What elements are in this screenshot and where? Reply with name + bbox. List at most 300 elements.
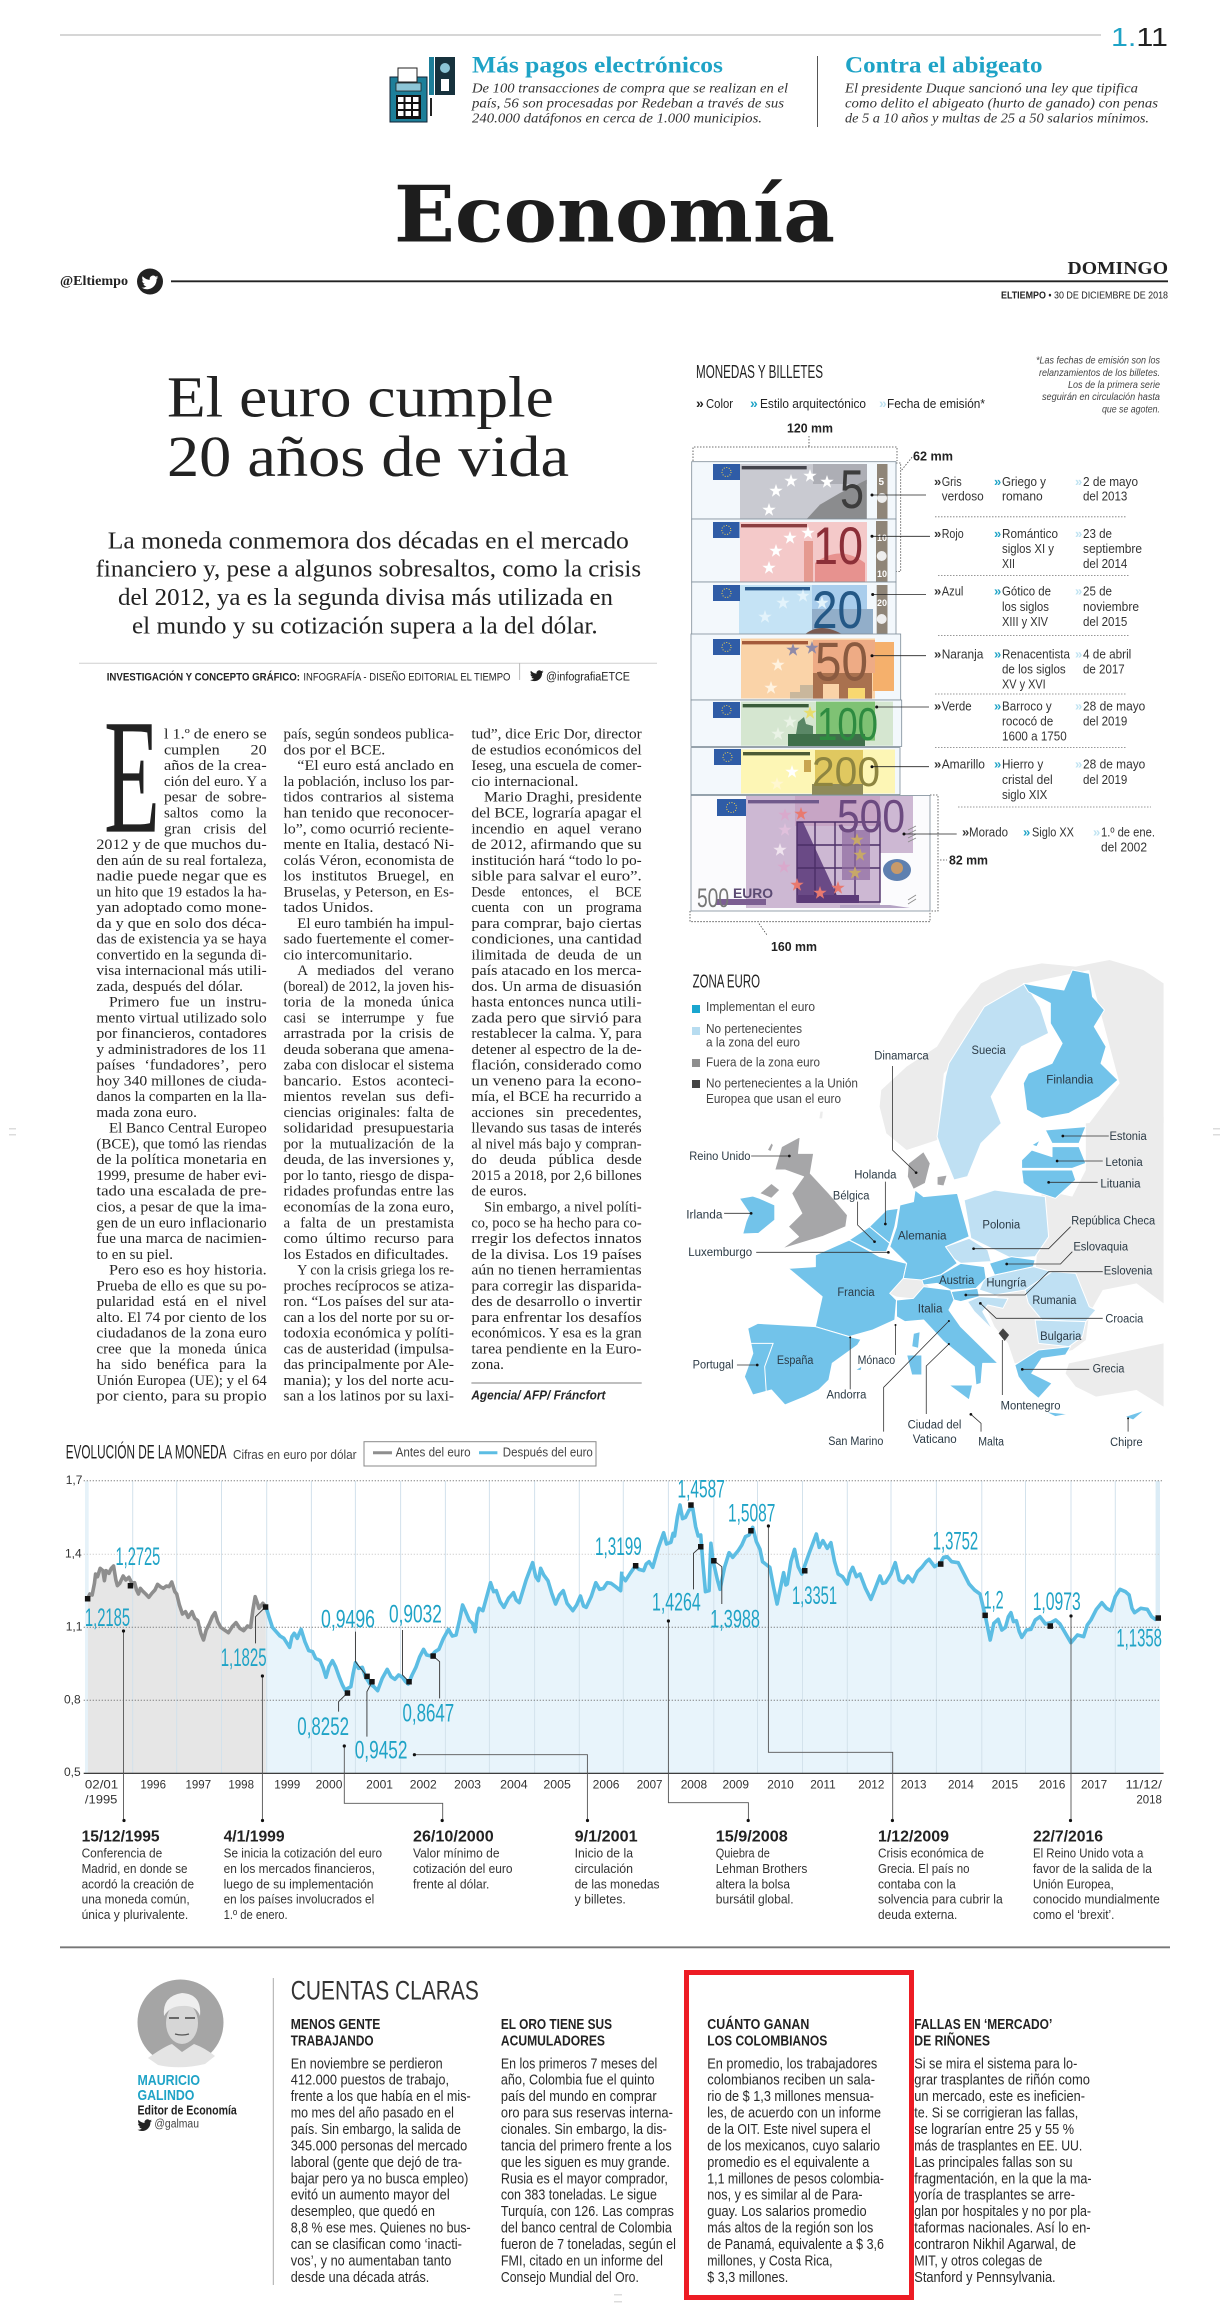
banknote: 200 euro: [691, 748, 900, 795]
map country labels: Alemania: [898, 1228, 947, 1242]
data value labels: 1,1825: [221, 1644, 267, 1672]
article body column 1: de la política monetaria en: [96, 1152, 268, 1168]
brief: fallas en mercado de riñones: se lograrían entre 25 y 55 %: [914, 2121, 1074, 2138]
article body column 1: 1999, presume de haber evi-: [96, 1168, 267, 1184]
banknote attribute table: Romántico: [1002, 526, 1058, 541]
brief: menos gente trabajando: En noviembre se perdieron: [291, 2055, 443, 2072]
brief: menos gente trabajando: bajar pero ya no busca empleo): [291, 2170, 468, 2187]
timeline note: 15/9/2008: Lehman Brothers: [716, 1862, 807, 1876]
article body column 1: [96, 687, 268, 1405]
banknote: 100 euro: [691, 698, 902, 750]
map legend: Europea que usan el euro: [706, 1091, 841, 1106]
map legend: Implementan el euro: [706, 999, 815, 1014]
credit line: INFOGRAFÍA - DISEÑO EDITORIAL EL TIEMPO: [303, 671, 511, 684]
dimension labels: [771, 422, 988, 954]
timeline note: 26/10/2000: Valor mínimo de: [413, 1847, 500, 1861]
banknote attribute table: Azul: [942, 584, 963, 599]
timeline note: 15/12/1995: Conferencia de: [82, 1847, 162, 1861]
brief: fallas en mercado de riñones: te. Si se corrigieran las fallas,: [914, 2105, 1078, 2122]
x axis labels: 2012: [858, 1777, 885, 1791]
article body column 3: tud”, dice Eric Dor, director: [471, 727, 642, 743]
article body column 2: por lo tanto, riesgo de dispa-: [284, 1168, 454, 1184]
banknote attribute table: Siglo XX: [1032, 825, 1074, 840]
article body column 1: danos la comparten en la lla-: [96, 1089, 267, 1105]
timeline note: 1/12/2009: contaba con la: [878, 1877, 956, 1891]
brief highlighted in red: cuánto ganan los colombianos: 1,1 millones de pesos colombia-: [707, 2170, 884, 2187]
brief: el oro tiene sus acumuladores: cionales. Sin embargo, la dis-: [501, 2121, 667, 2138]
y axis labels: 0,8: [64, 1692, 81, 1706]
news brief: Contra el abigeato: Contra el abigeato: [845, 53, 1042, 78]
credit line: @infografiaETCE: [546, 672, 630, 684]
headline: [167, 365, 569, 489]
banknote attribute table: 4 de abril: [1083, 646, 1131, 661]
banknote attribute table: Gris: [942, 474, 962, 489]
key of banknote table columns: Color: [706, 396, 734, 411]
brief: el oro tiene sus acumuladores: [501, 2017, 676, 2286]
data value labels: 1,2185: [85, 1604, 130, 1632]
timeline note: 15/9/2008: bursátil global.: [716, 1893, 794, 1907]
article body column 3: mía, el BCE ha recurrido a: [471, 1089, 642, 1105]
brief highlighted in red: cuánto ganan los colombianos: de la OIT. Este nivel supera el: [707, 2121, 871, 2138]
brief: menos gente trabajando: 8,8 % ese mes. Quienes no bus-: [291, 2220, 471, 2237]
article body column 3: flación, considerado como: [471, 1058, 642, 1074]
banknote attribute table: Naranja: [942, 646, 984, 661]
columnist byline: [138, 2072, 237, 2131]
data value labels: 1,5087: [728, 1500, 775, 1528]
timeline note: 22/7/2016: [1033, 1829, 1160, 1922]
x axis labels: 1999: [274, 1777, 301, 1791]
key of banknote table columns: [696, 395, 985, 411]
data value labels: 0,9496: [321, 1605, 375, 1633]
timeline note: 4/1/1999: Se inicia la cotización del euro: [224, 1847, 382, 1861]
map country labels: Mónaco: [858, 1353, 895, 1367]
brief: el oro tiene sus acumuladores: ACUMULADORES: [501, 2034, 605, 2050]
article body column 1: saltos como la: [164, 806, 267, 822]
article body column 2: como último recurso para: [284, 1231, 455, 1247]
banknote: 10 euro: [692, 517, 896, 582]
x axis labels: 2017: [1081, 1777, 1108, 1791]
article body column 2: A mediados del verano: [297, 963, 454, 979]
brief: menos gente trabajando: 345.000 personas del mercado: [291, 2138, 467, 2154]
banknote: 20 euro: 20: [812, 581, 863, 640]
map country labels: Suecia: [972, 1043, 1006, 1057]
banknote: 10 euro: 10: [877, 569, 887, 579]
x axis labels: 1998: [228, 1777, 254, 1791]
article body column 1: ciudadanos de la zona euro: [96, 1326, 267, 1342]
article body column 2: [284, 727, 455, 1405]
brief: menos gente trabajando: vos’, y no aumentaban tanto: [291, 2252, 451, 2270]
article body column 1: Pero eso es hoy historia.: [109, 1262, 267, 1278]
headline: 20 años de vida: [167, 424, 569, 489]
data line after the euro, 1999-2007: [266, 1563, 622, 1691]
x axis labels: 11/12/: [1126, 1777, 1163, 1791]
heading: monedas y billetes: MONEDAS Y BILLETES: [696, 361, 823, 382]
article body column 2: das principalmente por Ale-: [284, 1357, 454, 1373]
map country labels: Eslovenia: [1104, 1263, 1153, 1277]
article body column 3: tarea pendiente en la Euro-: [471, 1341, 642, 1357]
article body column 1: años de la crea-: [164, 758, 267, 774]
map legend: No pertenecientes: [706, 1021, 802, 1036]
x axis labels: 2008: [681, 1777, 708, 1791]
banknote attribute table: »: [934, 698, 941, 714]
x axis labels: 02/01: [85, 1777, 119, 1791]
article body column 1: y administradores de los 11: [96, 1042, 267, 1058]
timeline note: 26/10/2000: [413, 1829, 513, 1891]
banknote attribute table: »: [1075, 584, 1082, 599]
data value labels: 1,3752: [933, 1527, 978, 1555]
brief: fallas en mercado de riñones: glan por hospitales y no por pla-: [914, 2203, 1091, 2220]
article body column 1: yan adoptado como mone-: [96, 900, 267, 916]
brief highlighted in red: cuánto ganan los colombianos: colombianos reciben un sala-: [707, 2072, 875, 2089]
banknote attribute table: »: [1075, 526, 1082, 541]
brief: menos gente trabajando: [291, 2017, 471, 2286]
banknote: 50 euro: [691, 631, 901, 700]
article body column 3: do deuda pública desde: [471, 1152, 642, 1168]
x axis labels: 2018: [1136, 1792, 1162, 1806]
timeline note: 4/1/1999: luego de su implementación: [224, 1877, 374, 1891]
article body column 1: gen de un euro inflacionario: [96, 1215, 267, 1231]
article body column 1: nadie puede negar que es: [96, 868, 267, 884]
x axis labels: 2016: [1039, 1777, 1066, 1791]
brief: el oro tiene sus acumuladores: con 383 toneladas. Le sigue: [501, 2187, 657, 2204]
map country labels: [686, 1043, 1155, 1449]
article body column 2: bancario. Estos aconteci-: [284, 1073, 454, 1089]
banknote attribute table: 28 de mayo: [1083, 698, 1145, 714]
news brief: Más pagos electrónicos: Más pagos electrónicos: [472, 53, 723, 78]
dimension labels: 62 mm: [913, 450, 953, 464]
twitter handle and masthead rule: [60, 268, 1168, 294]
x axis labels: 2014: [948, 1777, 974, 1791]
map legend: Fuera de la zona euro: [706, 1055, 820, 1070]
brief highlighted in red: cuánto ganan los colombianos: En promedio, los trabajadores: [707, 2055, 877, 2072]
x axis labels: 1996: [140, 1777, 166, 1791]
brief: el oro tiene sus acumuladores: tancia del primero frente a los: [501, 2138, 672, 2154]
map country labels: Andorra: [827, 1388, 867, 1402]
map legend: No pertenecientes a la Unión: [706, 1076, 858, 1091]
article body column 2: can a los del norte por su or-: [284, 1310, 454, 1326]
banknote attribute table: del 2019: [1083, 713, 1127, 728]
timeline note: 9/1/2001: [575, 1829, 660, 1907]
banknote attribute table: del 2015: [1083, 614, 1127, 629]
article body column 2: dos por el BCE.: [284, 742, 385, 758]
timeline note: 4/1/1999: en los países involucrados el: [224, 1893, 374, 1907]
banknote attribute table: siglo XIX: [1002, 787, 1048, 802]
headline: El euro cumple: [167, 365, 554, 430]
year gridlines: [133, 1481, 1115, 1773]
article body column 2: proches recíprocos se atiza-: [284, 1278, 454, 1294]
timeline note: 1/12/2009: Grecia. El país no: [878, 1862, 970, 1876]
map country labels: Rumania: [1032, 1293, 1076, 1307]
banknote attribute table: cristal del: [1002, 772, 1053, 787]
timeline note: 26/10/2000: cotización del euro: [413, 1862, 513, 1876]
footnote on issue dates: *Las fechas de emisión son los: [1036, 355, 1161, 367]
map country labels: Italia: [918, 1302, 943, 1316]
timeline note: 26/10/2000: 26/10/2000: [413, 1829, 494, 1846]
banknote attribute table: 28 de mayo: [1083, 757, 1145, 772]
banknote: 500 euro: [691, 790, 930, 913]
timeline note: 15/12/1995: única y plurivalente.: [82, 1908, 188, 1922]
chart legend: [364, 1442, 596, 1466]
map country labels: Austria: [939, 1273, 974, 1287]
article body column 3: Desde entonces, el BCE: [471, 884, 642, 900]
map country labels: Lituania: [1100, 1176, 1141, 1190]
map country labels: Hungría: [986, 1276, 1026, 1290]
x axis labels: 2006: [593, 1777, 620, 1791]
article body column 2: casi se interrumpe y fue: [284, 1010, 454, 1026]
news brief: Contra el abigeato: de 5 a 10 años y multas de 25 a 50 salarios mínimos.: [845, 111, 1149, 126]
article body column 2: país, según sondeos publica-: [284, 727, 454, 743]
article body column 2: por la mutualización de la: [284, 1136, 455, 1152]
article body column 1: hoy 340 millones de ciuda-: [96, 1073, 267, 1089]
article body column 2: zaba con dislocar el sistema: [284, 1058, 455, 1074]
columnist byline: GALINDO: [138, 2087, 195, 2104]
map country labels: Portugal: [693, 1358, 734, 1372]
article body column 3: Sin embargo, a nivel políti-: [484, 1200, 642, 1216]
data point markers: [85, 1502, 1161, 1696]
brief: fallas en mercado de riñones: Si se mira el sistema para lo-: [914, 2055, 1077, 2072]
article body column 3: zada pero que sirvió para: [471, 1010, 642, 1026]
brief: el oro tiene sus acumuladores: Rusia es el mayor comprador,: [501, 2170, 668, 2187]
brief highlighted in red: cuánto ganan los colombianos: [686, 1972, 912, 2298]
article body column 3: dos. Un arma de disuasión: [471, 979, 643, 995]
banknote: 20 euro: 20: [877, 598, 887, 608]
brief: el oro tiene sus acumuladores: fueron de 7 toneladas, según el: [501, 2236, 676, 2253]
article body column 2: arrastrada por la crisis de: [284, 1026, 454, 1042]
brief: fallas en mercado de riñones: DE RIÑONES: [914, 2032, 990, 2050]
article body column 1: países ‘fundadores’, pero: [96, 1058, 267, 1074]
article body column 2: Y con la crisis griega los re-: [297, 1262, 454, 1278]
columnist portrait: [138, 1980, 224, 2067]
x axis labels: 2002: [410, 1777, 437, 1791]
timeline note: 22/7/2016: conocido mundialmente: [1033, 1893, 1160, 1907]
timeline note: 9/1/2001: y billetes.: [575, 1893, 626, 1907]
news brief: Más pagos electrónicos: De 100 transacciones de compra que se realizan en el: [471, 81, 788, 96]
key of banknote table columns: »: [879, 395, 887, 411]
banknote: 50 euro: 50: [815, 631, 868, 693]
brief: menos gente trabajando: frente a los que había en el mis-: [291, 2088, 471, 2105]
map country labels: Chipre: [1110, 1435, 1143, 1449]
banknote attribute table: los siglos: [1002, 599, 1049, 614]
key of banknote table columns: »: [696, 395, 704, 411]
y axis labels: 0,5: [64, 1765, 81, 1779]
article body column 2: san a los latinos por su laxi-: [284, 1389, 454, 1405]
x axis labels: 2003: [454, 1777, 481, 1791]
brief highlighted in red: cuánto ganan los colombianos: promedio es el equivalente a: [707, 2154, 870, 2171]
timeline note: 1/12/2009: deuda externa.: [878, 1908, 957, 1922]
section title: Economía: Economía: [394, 170, 835, 261]
article body column 1: por ciento, para su propio: [96, 1389, 267, 1405]
data line after the euro, 2007-2018: [622, 1505, 1156, 1643]
dimension marks for banknotes: [690, 436, 947, 935]
article body column 1: mada zona euro.: [96, 1105, 197, 1121]
data value labels: 0,8647: [402, 1700, 454, 1728]
banknote attribute table: noviembre: [1083, 599, 1139, 614]
banknote attribute table: Renacentista: [1002, 646, 1071, 661]
brief: menos gente trabajando: país. Sin embargo, la salida de: [291, 2121, 461, 2138]
brief: fallas en mercado de riñones: un mercado, este es ineficien-: [914, 2088, 1085, 2105]
article body column 2: (boreal) de 2012, la joven his-: [284, 979, 454, 995]
banknote: 500 euro: 500: [697, 883, 729, 913]
banknote: 10 euro: 10: [877, 533, 887, 543]
value label leader lines: [256, 1608, 440, 1737]
banknote: 5 euro: [692, 458, 896, 520]
article body column 3: rregir los defectos innatos: [471, 1231, 642, 1247]
article body column 3: económicos. Y esa es la gran: [471, 1326, 642, 1342]
map country labels: Ciudad del: [908, 1417, 961, 1431]
x axis labels: 2004: [500, 1777, 528, 1791]
article body column 1: da y que en solo dos déca-: [96, 916, 267, 932]
timeline note: 15/9/2008: altera la bolsa: [716, 1877, 790, 1891]
chart title and unit: EVOLUCIÓN DE LA MONEDA: [66, 1440, 226, 1463]
article body column 1: cree que la moneda única: [96, 1341, 267, 1357]
timeline note: 1/12/2009: solvencia para cubrir la: [878, 1893, 1003, 1907]
deck paragraph: La moneda conmemora dos décadas en el mercado: [108, 528, 629, 554]
footnote on issue dates: [1036, 355, 1161, 415]
x axis labels: 1997: [186, 1777, 211, 1791]
article body column 2: han tenido que reconocer-: [284, 806, 454, 822]
banknote attribute table: [870, 474, 1155, 855]
map country labels: República Checa: [1071, 1213, 1155, 1227]
banknote attribute table: »: [1075, 698, 1082, 714]
columnist byline: MAURICIO: [138, 2072, 200, 2089]
key of banknote table columns: Estilo arquitectónico: [760, 396, 866, 411]
brief: fallas en mercado de riñones: FALLAS EN ‘MERCADO’: [914, 2017, 1052, 2033]
banknote attribute table: »: [994, 646, 1001, 661]
article body column 3: del BCE, lograría apagar el: [471, 806, 642, 822]
brief: el oro tiene sus acumuladores: Turquía, con 126. Las compras: [501, 2203, 674, 2220]
article body column 1: (BCE), que tomó las riendas: [96, 1136, 267, 1152]
x axis labels: 2015: [992, 1777, 1018, 1791]
dimension labels: 82 mm: [949, 853, 988, 867]
brief: el oro tiene sus acumuladores: oro para sus reservas interna-: [501, 2105, 673, 2122]
banknote attribute table: Griego y: [1002, 474, 1046, 489]
data value labels: [85, 1475, 1162, 1764]
dimension labels: 160 mm: [771, 940, 817, 954]
article body column 2: tados Unidos.: [284, 900, 374, 916]
article body column 3: para enfrentar los desafíos: [471, 1310, 642, 1326]
banknote attribute table: »: [994, 757, 1001, 772]
article body column 1: visa internacional más utili-: [96, 963, 267, 979]
columnist byline: Editor de Economía: [138, 2102, 237, 2117]
article body column 2: toria de la moneda única: [284, 995, 455, 1011]
banknote attribute table: »: [1093, 825, 1100, 840]
dimension labels: 120 mm: [787, 422, 833, 436]
map country labels: Eslovaquia: [1073, 1240, 1128, 1254]
article body column 1: un hito que 19 estados la ha-: [96, 884, 267, 900]
banknote attribute table: 2 de mayo: [1083, 474, 1138, 489]
deck paragraph: financiero y, pese a algunos sobresaltos, como la crisis: [96, 557, 641, 583]
article body column 1: por financieros, contadores: [96, 1026, 267, 1042]
banknote: 5 euro: 5: [878, 477, 884, 488]
banknote attribute table: Rojo: [942, 526, 964, 541]
brief highlighted in red: cuánto ganan los colombianos: LOS COLOMBIANOS: [707, 2034, 828, 2050]
timeline note: 26/10/2000: frente al dólar.: [413, 1877, 489, 1891]
brief: el oro tiene sus acumuladores: FMI, citado en un informe del: [501, 2252, 663, 2270]
banknote attribute table: »: [934, 584, 941, 599]
map country labels: San Marino: [828, 1434, 883, 1448]
article body column 2: ron. “Los países del sur ata-: [284, 1294, 454, 1310]
brief: el oro tiene sus acumuladores: país del mundo en comprar: [501, 2088, 657, 2105]
brief highlighted in red: cuánto ganan los colombianos: de los mexicanos, cuyo salario: [707, 2138, 880, 2154]
banknote attribute table: 23 de: [1083, 526, 1112, 541]
article body column 3: detener al espectro de la de-: [471, 1042, 642, 1058]
map leader lines: [724, 1066, 1128, 1432]
heading: zona euro: ZONA EURO: [693, 970, 760, 991]
article body column 2: a falta de un prestamista: [284, 1215, 455, 1231]
footnote on issue dates: seguirán en circulación hasta: [1042, 391, 1160, 403]
timeline note: 4/1/1999: [224, 1829, 382, 1922]
article body column 1: tado una escalada de pre-: [96, 1184, 267, 1200]
brief: fallas en mercado de riñones: [914, 2017, 1092, 2286]
map country labels: Bélgica: [833, 1188, 870, 1202]
timeline note: 9/1/2001: Inicio de la: [575, 1847, 633, 1861]
article body column 1: cumplen 20: [164, 742, 267, 758]
banknote attribute table: septiembre: [1083, 541, 1142, 556]
data value labels: 1,2725: [116, 1543, 160, 1571]
news brief: Más pagos electrónicos: país, 56 son procesadas por Redeban a través de sus: [471, 96, 785, 111]
news brief: Más pagos electrónicos: 240.000 datáfonos en cerca de 1.000 municipios.: [472, 111, 762, 126]
data value labels: 0,9452: [355, 1736, 408, 1764]
brief: fallas en mercado de riñones: contraron Nikhil Agarwal, de: [914, 2236, 1076, 2253]
article body column 3: [470, 727, 643, 1402]
banknote attribute table: »: [994, 526, 1001, 541]
brief highlighted in red: cuánto ganan los colombianos: nos, y es similar al de Para-: [707, 2187, 863, 2204]
article body column 3: país atacado en los merca-: [471, 963, 642, 979]
article body column 3: para corregir las disparida-: [471, 1278, 642, 1294]
credit line: [79, 663, 657, 684]
timeline note: 22/7/2016: como el ‘brexit’.: [1033, 1908, 1114, 1922]
map country labels: España: [777, 1353, 813, 1367]
data line before the euro: [88, 1566, 266, 1640]
x axis labels: 2007: [637, 1777, 663, 1791]
article body column 1: El Banco Central Europeo: [109, 1121, 267, 1137]
banknote attribute table: »: [1075, 757, 1082, 772]
article body column 3: cuenta con un programa: [471, 900, 642, 916]
map country labels: Francia: [837, 1285, 875, 1299]
credit line: INVESTIGACIÓN Y CONCEPTO GRÁFICO:: [107, 671, 300, 684]
banknote attribute table: XV y XVI: [1002, 676, 1046, 691]
article body column 2: mente en Italia, destacó Ni-: [284, 837, 454, 853]
banknote attribute table: »: [934, 757, 941, 772]
x axis labels: [85, 1777, 1163, 1806]
article body column 3: llevando sus tasas de interés: [471, 1121, 642, 1137]
data value labels: 0,8252: [297, 1713, 349, 1741]
data value labels: 1,3988: [710, 1605, 760, 1633]
brief: menos gente trabajando: MENOS GENTE: [291, 2017, 381, 2033]
deck paragraph: el mundo y su cotización supera a la del dólar.: [132, 613, 598, 639]
article body column 1: den aún de su real fortaleza,: [96, 853, 267, 869]
banknote attribute table: del 2014: [1083, 556, 1127, 571]
timeline note: 15/12/1995: 15/12/1995: [82, 1829, 160, 1846]
brief: fallas en mercado de riñones: Stanford y Pennsylvania.: [914, 2269, 1056, 2286]
map of the euro zone: [686, 960, 1164, 1449]
news brief: Contra el abigeato: El presidente Duque sancionó una ley que tipifica: [844, 81, 1138, 96]
brief: menos gente trabajando: desempleo, que quedó en: [291, 2203, 435, 2220]
timeline note: 9/1/2001: de las monedas: [575, 1877, 660, 1891]
banknote attribute table: »: [994, 584, 1001, 599]
news brief: Más pagos electrónicos: [471, 53, 788, 126]
brief: el oro tiene sus acumuladores: En los primeros 7 meses del: [501, 2055, 657, 2072]
banknote attribute table: romano: [1002, 489, 1043, 504]
timeline note: 4/1/1999: 4/1/1999: [224, 1829, 285, 1846]
banknote attribute table: »: [1075, 474, 1082, 489]
article body column 2: todoxia económica y políti-: [284, 1326, 454, 1342]
map country labels: Irlanda: [686, 1208, 722, 1222]
column title: CUENTAS CLARAS: [291, 1975, 479, 2005]
timeline note: 15/9/2008: Quiebra de: [716, 1847, 770, 1861]
brief: el oro tiene sus acumuladores: EL ORO TIENE SUS: [501, 2017, 612, 2033]
y axis labels: 1,1: [66, 1620, 83, 1634]
